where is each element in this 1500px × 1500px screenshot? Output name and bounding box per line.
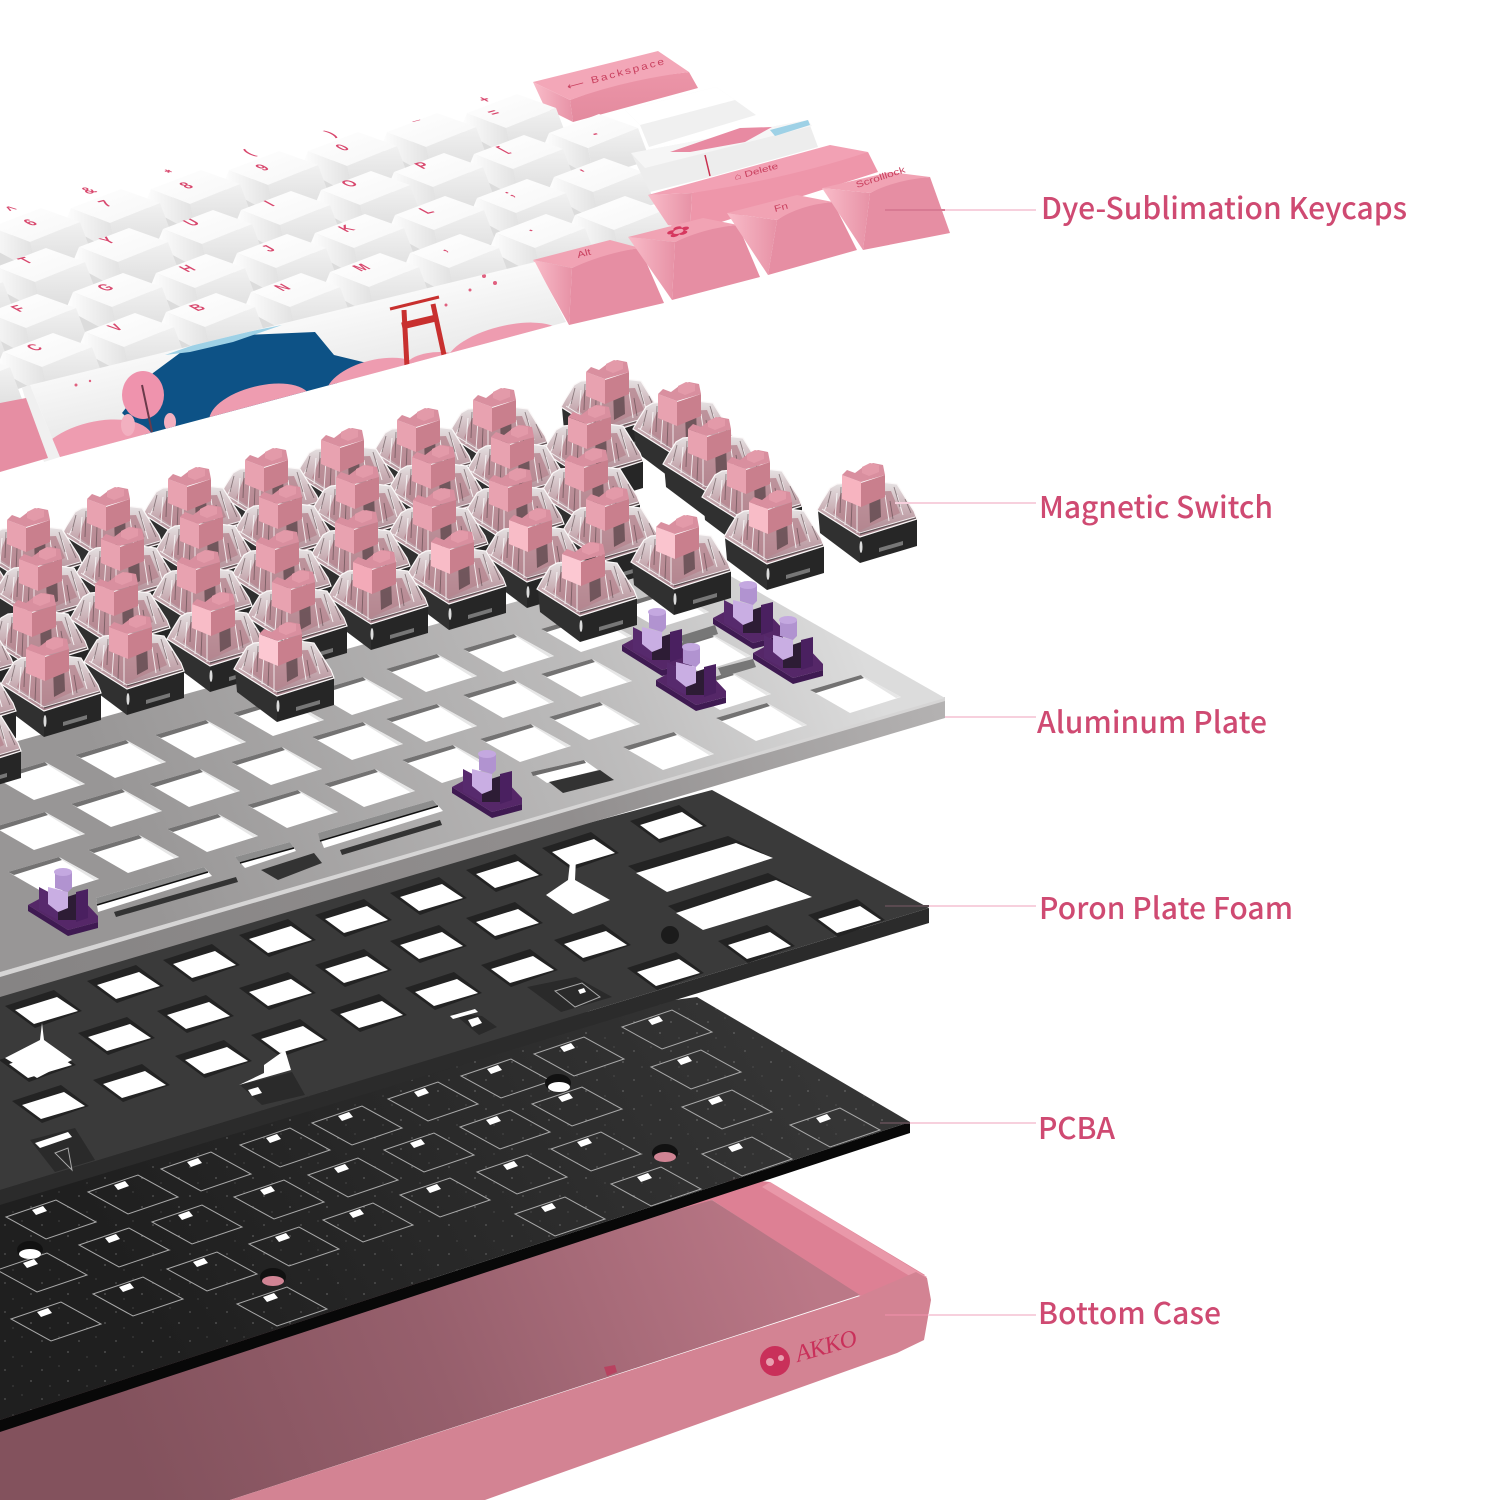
label: bottom case: Bottom Case xyxy=(1038,1289,1221,1333)
foam key holes xyxy=(0,805,885,1123)
magnetic switches xyxy=(0,360,917,795)
key legends: = xyxy=(483,108,506,118)
key legends: * xyxy=(161,168,182,178)
key legends: V xyxy=(104,323,128,333)
key legends: & xyxy=(77,185,102,196)
pink hills xyxy=(52,420,151,457)
aluminum plate xyxy=(0,553,945,997)
enter key xyxy=(648,145,878,232)
key legends: U xyxy=(180,218,205,228)
case floor xyxy=(0,1200,860,1500)
art key right xyxy=(631,120,818,192)
key legends: 7 xyxy=(95,199,117,209)
key legends: . xyxy=(519,224,538,234)
leader lines xyxy=(880,210,1036,1315)
key legends xyxy=(2,95,605,353)
key legends: ; xyxy=(500,189,519,199)
key legends: 6 xyxy=(20,218,42,228)
key legends: O xyxy=(338,178,363,189)
key legends: T xyxy=(15,256,38,266)
key legends: P xyxy=(411,161,435,171)
Akko logo xyxy=(760,1325,860,1376)
case dent xyxy=(604,1365,617,1376)
key legends: 9 xyxy=(252,163,274,173)
key legends: [ xyxy=(494,145,513,155)
key legends: ) xyxy=(322,129,341,139)
key legends: 0 xyxy=(332,143,354,153)
key legends: _ xyxy=(399,113,423,123)
key legends: M xyxy=(349,262,375,274)
fn key xyxy=(727,195,857,275)
stabilizers xyxy=(28,581,823,936)
key legends: Y xyxy=(96,236,120,246)
key legends: F xyxy=(8,304,31,314)
backspace key: ⟵ Backspace xyxy=(566,56,665,93)
key legends: - xyxy=(586,129,605,139)
label: PCBA: PCBA xyxy=(1038,1104,1115,1148)
cherry tree xyxy=(122,371,164,419)
upper right white key xyxy=(625,87,756,147)
key legends: G xyxy=(94,282,119,293)
spacebar with mountain art xyxy=(22,262,566,462)
foam layer xyxy=(0,790,929,1205)
snow xyxy=(165,325,282,355)
key footprints xyxy=(0,1010,880,1341)
case front wall xyxy=(230,1272,931,1500)
key legends: C xyxy=(23,342,48,353)
fn key: Fn xyxy=(773,201,789,214)
label: plate: Aluminum Plate xyxy=(1037,698,1267,742)
scroll key xyxy=(822,165,950,250)
key legends: ^ xyxy=(2,205,25,215)
key legends: ' xyxy=(577,168,595,177)
torii gate xyxy=(390,297,444,367)
dye-sublimation keycaps xyxy=(0,51,950,496)
key legends: L xyxy=(416,206,439,216)
plate key holes xyxy=(0,590,901,895)
alt key: Alt xyxy=(576,247,592,260)
key legends: 8 xyxy=(176,181,198,191)
key legends: J xyxy=(258,244,280,254)
case rim xyxy=(762,1182,927,1281)
key legends: K xyxy=(335,223,360,234)
flower key: ✿ xyxy=(664,220,693,242)
label: switch: Magnetic Switch xyxy=(1039,483,1273,527)
key legends: B xyxy=(186,302,211,313)
left pink key xyxy=(0,398,48,472)
mounting holes xyxy=(17,1074,678,1286)
PCBA layer xyxy=(0,997,910,1432)
petals xyxy=(74,274,497,386)
key legends: I xyxy=(261,199,280,209)
Akko logo: AKKO xyxy=(791,1325,860,1368)
enter key: ⌂ Delete xyxy=(733,162,780,182)
stabilizer slots xyxy=(96,760,614,917)
foam large cutouts xyxy=(5,836,812,1172)
label: keycaps: Dye-Sublimation Keycaps xyxy=(1041,184,1407,228)
white alpha keys xyxy=(0,94,676,417)
key bed xyxy=(0,114,640,395)
key legends: ( xyxy=(240,148,259,158)
key legends: N xyxy=(271,283,296,293)
label: foam: Poron Plate Foam xyxy=(1039,884,1293,928)
case inner right wall xyxy=(640,1178,925,1296)
backspace key xyxy=(533,51,698,122)
key legends: , xyxy=(433,244,452,254)
key legends: + xyxy=(474,95,497,105)
bottom case xyxy=(0,1178,931,1500)
scroll key: Scrolllock xyxy=(855,165,907,190)
key legends: H xyxy=(176,264,201,274)
alt key xyxy=(533,240,664,325)
flower key xyxy=(628,218,760,300)
mountain xyxy=(122,332,367,440)
